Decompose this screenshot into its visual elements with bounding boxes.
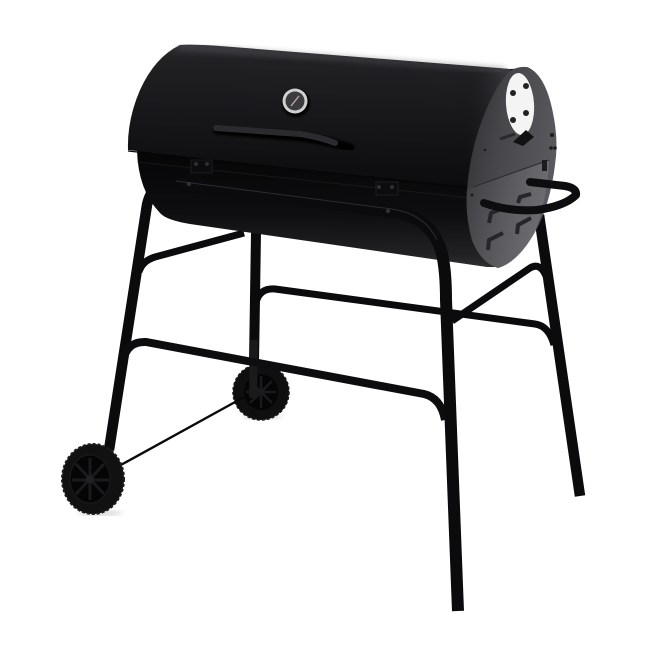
front frame rail and right front leg (176, 181, 458, 611)
axle rod (119, 396, 246, 466)
side handle (484, 182, 576, 210)
seam (128, 151, 470, 188)
air vents (488, 194, 531, 250)
grill barrel (128, 45, 576, 268)
back right leg (539, 215, 580, 496)
top highlight (178, 47, 505, 70)
hinges (191, 160, 398, 195)
vent disc (504, 72, 536, 136)
left front leg (109, 183, 445, 450)
front wheel (62, 444, 124, 516)
upper lid (128, 45, 530, 188)
end cap (467, 67, 556, 268)
back left leg (254, 233, 256, 362)
right side bar (452, 266, 546, 321)
lower front crossbar (123, 342, 445, 420)
back leg over wheel (253, 340, 254, 398)
lower drum (137, 150, 500, 267)
rivets (470, 133, 557, 196)
back legs and crossbars (139, 215, 580, 496)
back wheel (233, 364, 289, 420)
rail bolts (187, 182, 191, 186)
lid handle (216, 128, 350, 148)
vent knob (513, 130, 534, 146)
thermometer (282, 88, 310, 117)
left side bar (139, 233, 244, 272)
lower cap panel (467, 160, 549, 268)
back crossbar (256, 289, 554, 345)
